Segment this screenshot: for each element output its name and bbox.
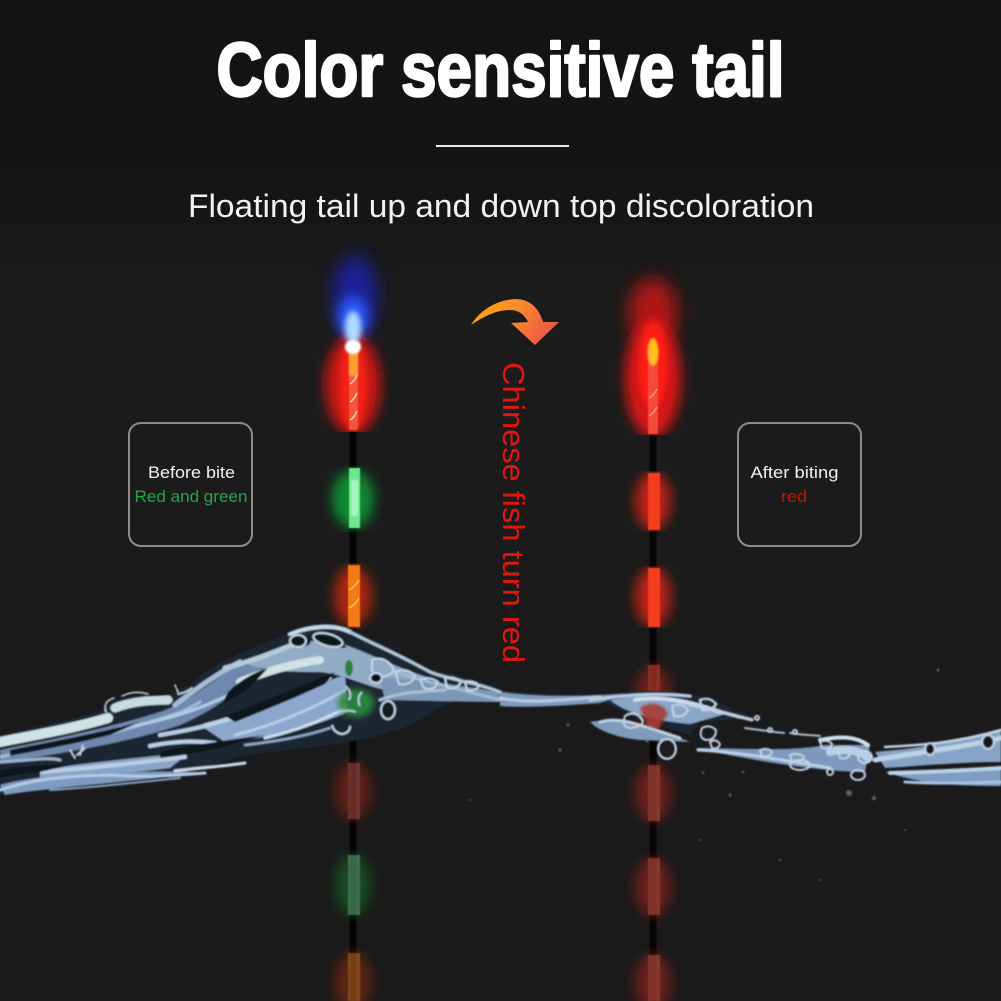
right float line [650, 428, 656, 1001]
title: Color sensitive tail [216, 28, 784, 113]
water droplets [469, 668, 940, 881]
right tip glow [625, 278, 681, 438]
callout: before bite [129, 423, 252, 546]
subtitle: Floating tail up and down top discoloration [188, 188, 814, 224]
water broad blue masses [0, 640, 1001, 795]
right submerged segment 5 [635, 858, 671, 916]
water body [0, 623, 755, 795]
right submerged segment 4 [635, 765, 671, 821]
left tip glow: blue and red [325, 255, 381, 435]
water dark shadows [0, 634, 346, 778]
callout: after biting: After biting [750, 463, 838, 482]
right float: after biting [625, 278, 681, 1001]
ridge loops near float [290, 630, 479, 734]
left submerged orange segment [335, 953, 371, 1001]
callout: after biting [738, 423, 861, 546]
left water streaks [0, 627, 500, 790]
green glow inside water [338, 660, 374, 717]
left float line [350, 425, 356, 1001]
left submerged red segment [335, 763, 371, 819]
right water red glow [640, 704, 668, 728]
right water streaks [500, 694, 1001, 783]
left submerged green segment [335, 855, 371, 915]
right red segment 2 [635, 567, 671, 627]
left float: before bite [325, 255, 381, 1001]
callout: after biting: red [781, 487, 807, 506]
title divider [436, 145, 569, 147]
right red segment 3 [635, 665, 671, 728]
arrow [471, 299, 559, 345]
water bubbles [624, 699, 994, 780]
left green segment [332, 468, 374, 528]
right submerged segment 6 [635, 954, 671, 1001]
callout: before bite: Before bite [148, 463, 235, 482]
vertical label: Chinese fish turn red: Chinese fish turn red [496, 362, 531, 663]
callout: before bite: Red and green [134, 487, 248, 506]
left orange segment [334, 565, 372, 627]
right red segment 1 [635, 472, 671, 530]
water splash [0, 623, 1001, 881]
